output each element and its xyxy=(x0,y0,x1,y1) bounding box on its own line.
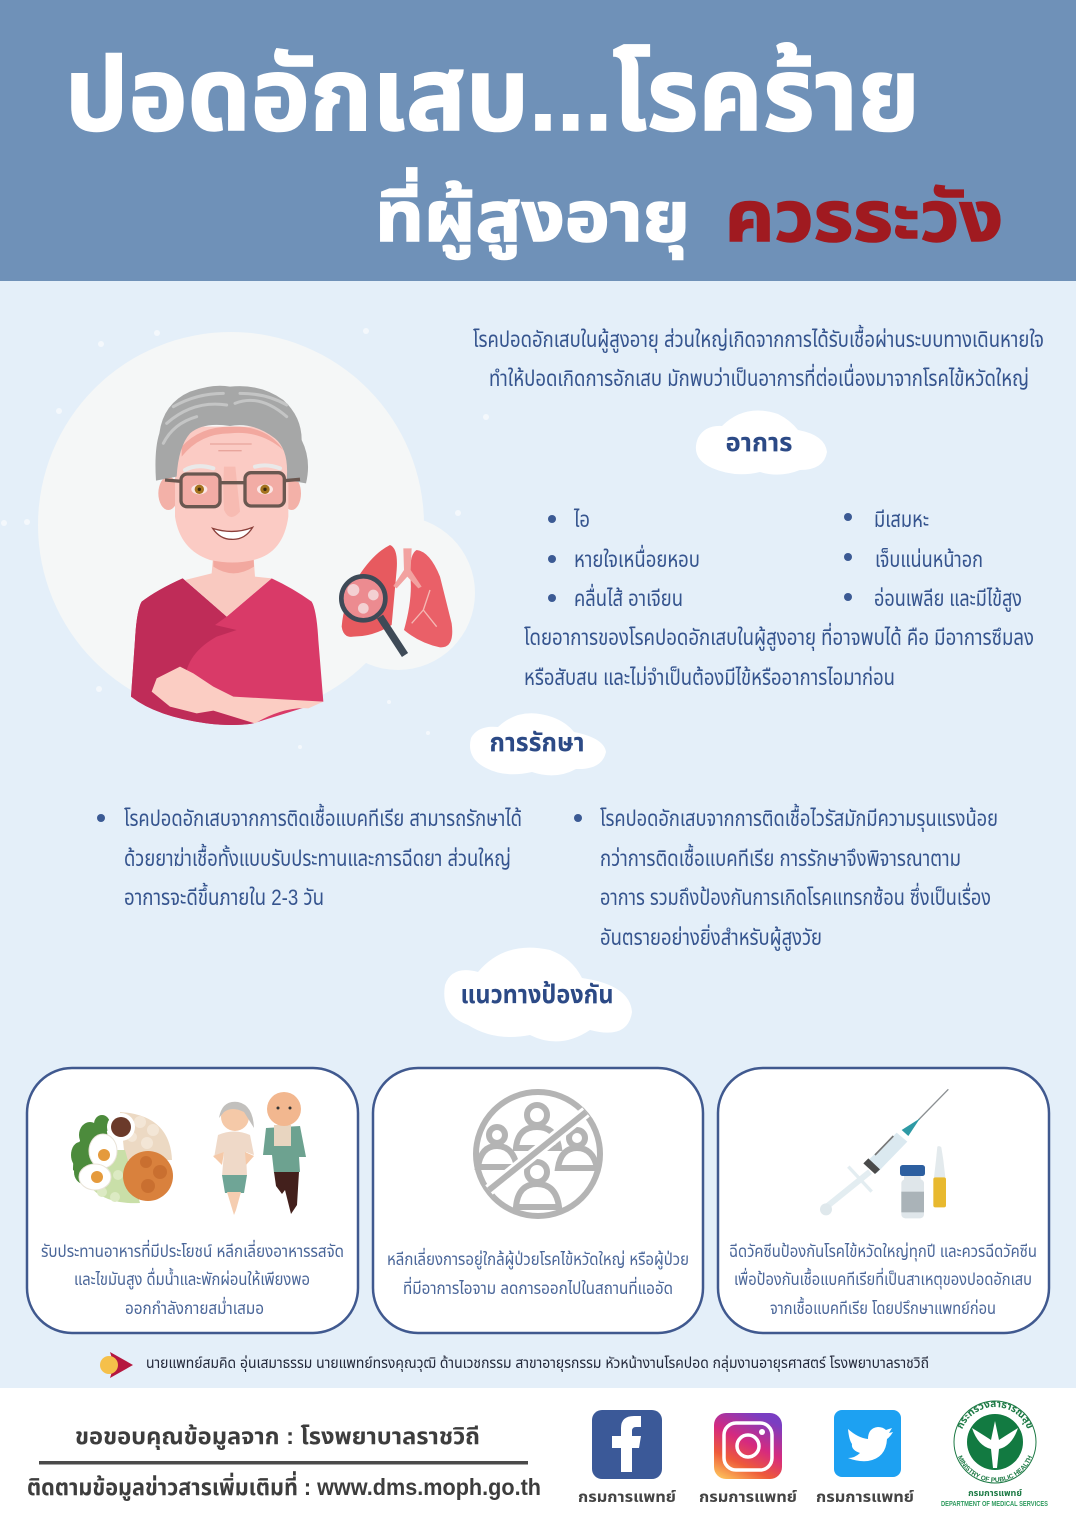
icon: shirt xyxy=(131,578,323,725)
treatment left column xyxy=(97,803,522,910)
treatment right column xyxy=(574,803,998,951)
icon: twitter xyxy=(834,1410,901,1477)
mouth xyxy=(213,527,253,539)
footer xyxy=(0,1388,1076,1522)
title line 2: ที่ผู้สูงอายุ xyxy=(375,168,690,259)
symptoms note xyxy=(524,622,1034,690)
icon: elderly couple jogging xyxy=(213,1092,306,1215)
thanks text: ขอขอบคุณข้อมูลจาก : โรงพยาบาลราชวิถี xyxy=(75,1423,480,1450)
heading: prevention: แนวทางป้องกัน xyxy=(460,979,614,1009)
heading: treatment xyxy=(470,713,606,775)
icon: syringe xyxy=(820,1089,948,1215)
credit line xyxy=(100,1352,929,1378)
title warning: ควรระวัง xyxy=(725,178,1003,256)
panel: healthy food and exercise xyxy=(27,1068,358,1333)
logo: ministry of public health: DEPARTMENT OF MEDICAL SERVICES xyxy=(941,1501,1048,1508)
heading: prevention xyxy=(444,948,632,1041)
symptoms list: หายใจเหนื่อยหอบ xyxy=(574,544,700,572)
treatment left column: ด้วยยาฆ่าเชื้อทั้งแบบรับประทานและการฉีดยา ส่วนใหญ่ xyxy=(124,843,511,871)
treatment right column: กว่าการติดเชื้อแบคทีเรีย การรักษาจึงพิจารณาตาม xyxy=(600,843,961,871)
glasses xyxy=(165,473,300,507)
icon: credit marker xyxy=(100,1352,133,1378)
logo: ministry of public health xyxy=(941,1400,1048,1508)
heading: treatment: การรักษา xyxy=(490,727,584,757)
eyebrows xyxy=(185,465,280,470)
icon: lungs xyxy=(341,545,452,655)
treatment right column: อันตรายอย่างยิ่งสำหรับผู้สูงวัย xyxy=(600,923,822,951)
heading: symptoms: อาการ xyxy=(726,427,792,457)
magnifier xyxy=(341,576,405,655)
treatment left column: อาการจะดีขึ้นภายใน 2-3 วัน xyxy=(124,882,324,910)
panel: vaccination xyxy=(718,1068,1049,1333)
icon: facebook xyxy=(592,1410,662,1479)
intro text xyxy=(473,324,1044,391)
social labels xyxy=(578,1489,914,1506)
logo: ministry of public health: MINISTRY OF PUBLIC HEALTH xyxy=(958,1455,1032,1482)
icon: ampoule xyxy=(933,1146,946,1207)
logo: ministry of public health: กรมการแพทย์ xyxy=(968,1488,1022,1498)
social labels: กรมการแพทย์ xyxy=(816,1489,914,1506)
hair xyxy=(155,386,308,483)
face xyxy=(175,427,288,562)
text: และไขมันสูง ดื่มน้ำและพักผ่อนให้เพียงพอ xyxy=(74,1267,310,1291)
text: ฉีดวัคซีนป้องกันโรคไข้หวัดใหญ่ทุกปี และควรฉีดวัคซีน xyxy=(729,1241,1037,1262)
symptoms list xyxy=(548,507,1022,612)
ears xyxy=(158,477,301,510)
icon: vial xyxy=(900,1165,925,1218)
treatment right column: อาการ รวมถึงป้องกันการเกิดโรคแทรกซ้อน ซึ่งเป็นเรื่อง xyxy=(600,882,991,910)
text: รับประทานอาหารที่มีประโยชน์ หลีกเลี่ยงอาหารรสจัด xyxy=(41,1239,344,1261)
header band xyxy=(0,0,1076,281)
text: เพื่อป้องกันเชื้อแบคทีเรียที่เป็นสาเหตุของปอดอักเสบ xyxy=(734,1267,1032,1290)
heading: symptoms xyxy=(696,410,827,475)
social labels: กรมการแพทย์ xyxy=(578,1489,676,1506)
icon: no crowd xyxy=(476,1092,600,1216)
text: จากเชื้อแบคทีเรีย โดยปรึกษาแพทย์ก่อน xyxy=(770,1296,996,1318)
symptoms list: เจ็บแน่นหน้าอก xyxy=(875,547,983,572)
text xyxy=(41,1239,344,1318)
logo: ministry of public health: กระทรวงสาธารณสุข xyxy=(958,1402,1032,1429)
social labels: กรมการแพทย์ xyxy=(699,1489,797,1506)
icon: instagram xyxy=(714,1413,782,1479)
title line 1: ปอดอักเสบ...โรคร้าย xyxy=(65,38,920,152)
illustration: elderly man with lungs xyxy=(38,332,475,725)
text: หลีกเลี่ยงการอยู่ใกล้ผู้ป่วยโรคไข้หวัดใหญ่ หรือผู้ป่วย xyxy=(387,1247,689,1271)
symptoms list: อ่อนเพลีย และมีไข้สูง xyxy=(874,586,1022,612)
icon: food plate xyxy=(71,1112,173,1203)
credit line: นายแพทย์สมคิด อุ่นเสมาธรรม นายแพทย์ทรงคุณวุฒิ ด้านเวชกรรม สาขาอายุรกรรม หัวหน้างานโรคปอด กลุ่มงานอายุรศาสตร์ โรงพยาบาลราชวิถี xyxy=(146,1354,929,1372)
symptoms list: คลื่นไส้ อาเจียน xyxy=(574,583,683,611)
neck xyxy=(185,553,272,617)
follow text: ติดตามข้อมูลข่าวสารเพิ่มเติมที่ : www.dms.moph.go.th xyxy=(27,1471,541,1501)
panel: avoid crowds xyxy=(373,1068,703,1333)
symptoms list: ไอ xyxy=(573,507,590,532)
text xyxy=(387,1247,689,1298)
symptoms note: หรือสับสน และไม่จำเป็นต้องมีไข้หรืออาการไอมาก่อน xyxy=(524,665,895,690)
text: ออกกำลังกายสม่ำเสมอ xyxy=(125,1296,264,1318)
treatment right column: โรคปอดอักเสบจากการติดเชื้อไวรัสมักมีความรุนแรงน้อย xyxy=(600,803,998,832)
arm xyxy=(152,667,323,723)
text xyxy=(729,1241,1037,1318)
text: ที่มีอาการไอจาม ลดการออกไปในสถานที่แออัด xyxy=(403,1276,673,1298)
treatment left column: โรคปอดอักเสบจากการติดเชื้อแบคทีเรีย สามารถรักษาได้ xyxy=(124,803,522,831)
symptoms list: มีเสมหะ xyxy=(874,507,929,532)
